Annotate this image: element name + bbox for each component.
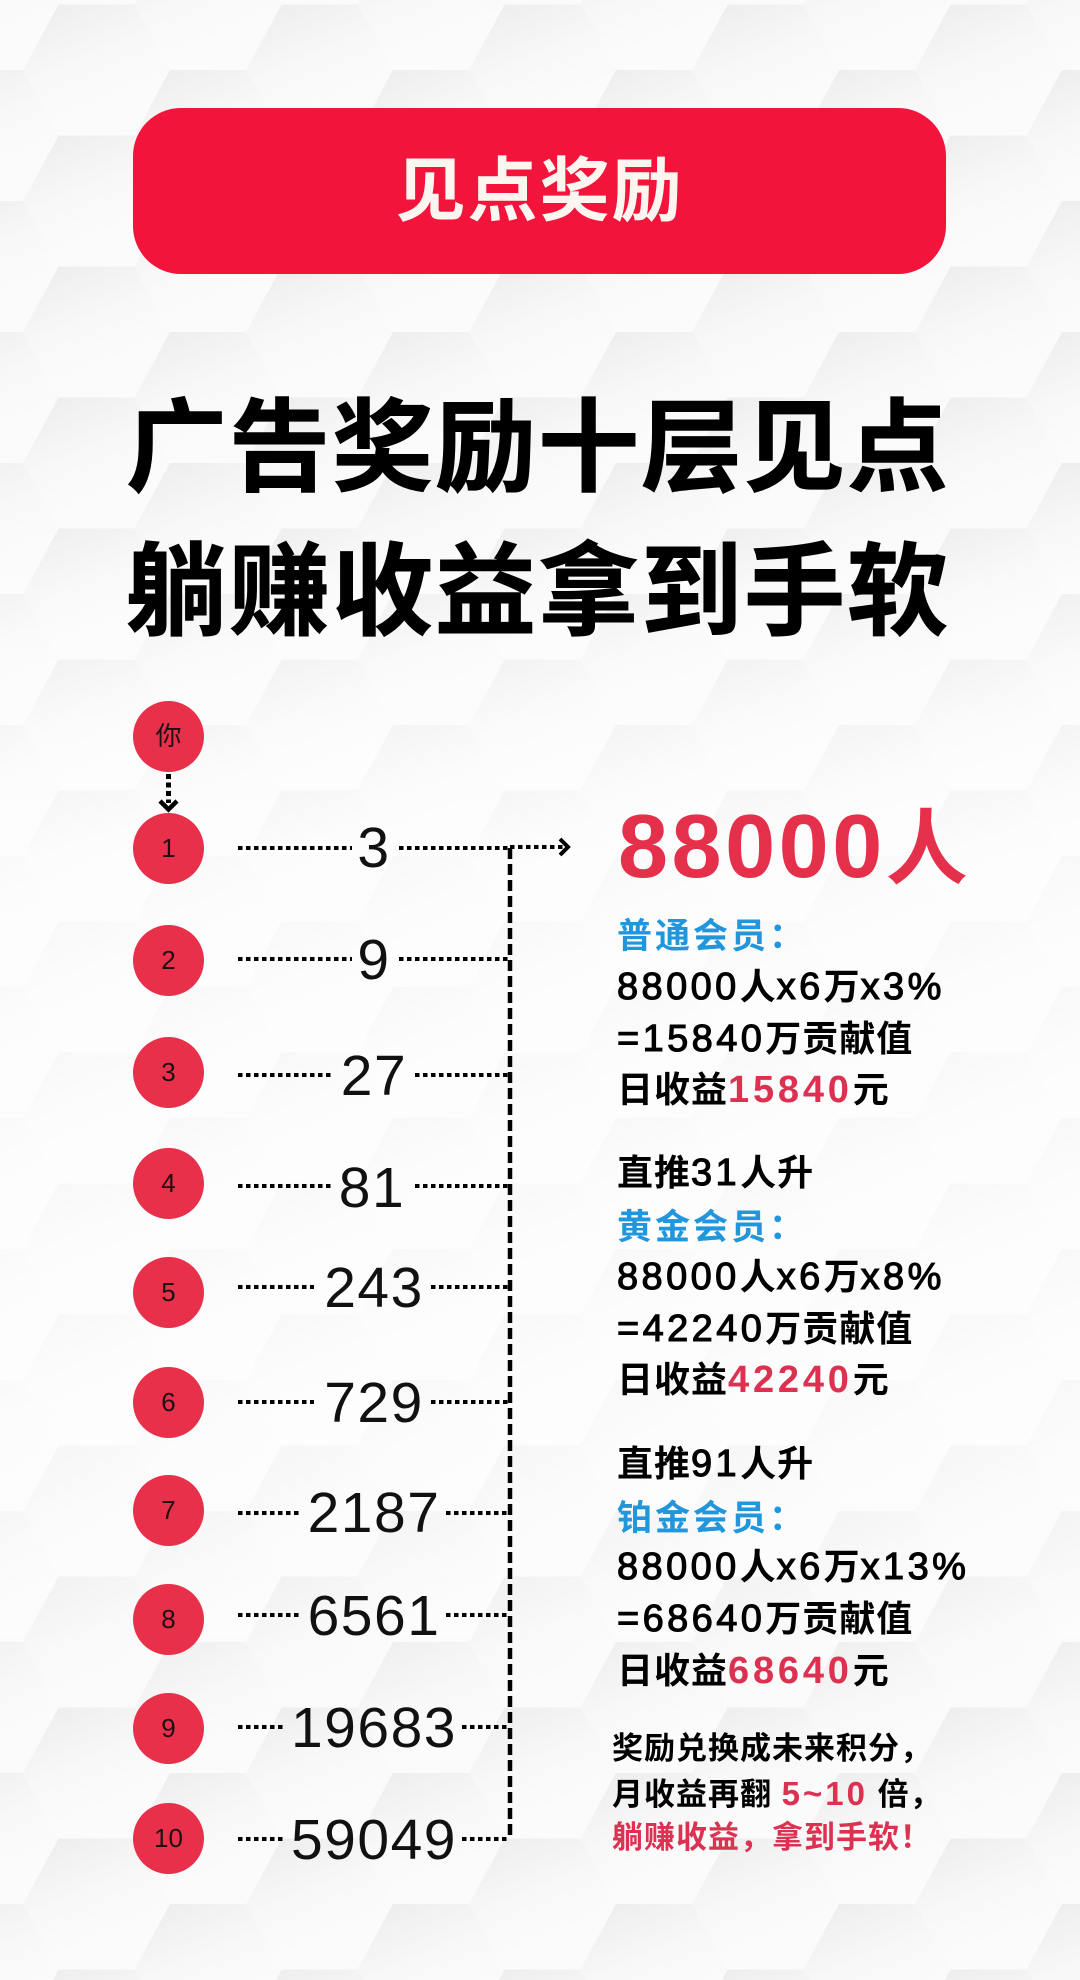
platinum member contribution: =68640万贡献值 <box>617 1598 913 1640</box>
row: level 10 <box>133 1803 506 1874</box>
note line 2: 月收益再翻 5~10 倍， <box>612 1775 942 1812</box>
note line 1: 奖励兑换成未来积分， <box>612 1731 932 1766</box>
regular member heading: 普通会员： <box>617 917 807 956</box>
gold member heading: 黄金会员： <box>617 1208 807 1247</box>
count 81: 81 <box>339 1156 405 1220</box>
row: level 9 <box>133 1693 506 1764</box>
circle 10 <box>133 1803 204 1874</box>
row: level 8 <box>133 1584 506 1655</box>
count 27: 27 <box>341 1044 407 1108</box>
title line 1: 广告奖励十层见点 <box>126 393 950 505</box>
block: gold member <box>617 1152 945 1401</box>
count 9: 9 <box>357 928 391 992</box>
count 6561: 6561 <box>308 1584 440 1648</box>
row: level 6 <box>133 1367 508 1438</box>
circle 6: 6 <box>161 1387 176 1417</box>
circle 8 <box>133 1584 204 1655</box>
regular member formula: 88000人x6万x3% <box>617 966 945 1008</box>
gold upgrade condition: 直推31人升 <box>617 1152 814 1194</box>
regular member contribution: =15840万贡献值 <box>617 1018 913 1060</box>
circle 9: 9 <box>161 1713 176 1743</box>
banner heading: 见点奖励 <box>396 152 684 230</box>
total: 88000 people: 88000人 <box>618 797 968 897</box>
title <box>126 393 950 649</box>
platinum member formula: 88000人x6万x13% <box>617 1546 969 1588</box>
circle 3: 3 <box>161 1057 176 1087</box>
row: level 5 <box>133 1256 508 1328</box>
row: level 3 <box>133 1037 508 1108</box>
gold member formula: 88000人x6万x8% <box>617 1256 945 1298</box>
circle 4: 4 <box>161 1168 176 1198</box>
count 3: 3 <box>357 816 391 880</box>
row: level 4 <box>133 1148 508 1220</box>
node: you: 你 <box>155 721 182 751</box>
circle 3 <box>133 1037 204 1108</box>
block: platinum member <box>617 1443 969 1692</box>
platinum member daily income: 日收益68640元 <box>617 1650 890 1692</box>
gold member daily income: 日收益42240元 <box>617 1359 890 1401</box>
circle 8: 8 <box>161 1604 176 1634</box>
platinum upgrade condition: 直推91人升 <box>617 1443 814 1485</box>
count 729: 729 <box>324 1371 424 1435</box>
note line 3: 躺赚收益，拿到手软！ <box>612 1820 932 1855</box>
row: level 1 <box>133 813 508 884</box>
circle 1: 1 <box>161 833 176 863</box>
node: you <box>133 701 204 772</box>
regular member daily income: 日收益15840元 <box>617 1069 890 1111</box>
circle 7 <box>133 1475 204 1546</box>
circle 6 <box>133 1367 204 1438</box>
circle 7: 7 <box>161 1495 176 1525</box>
circle 9 <box>133 1693 204 1764</box>
count 59049: 59049 <box>291 1808 457 1872</box>
circle 4 <box>133 1148 204 1219</box>
row: level 2 <box>133 925 508 996</box>
gold member contribution: =42240万贡献值 <box>617 1308 913 1350</box>
block: regular member <box>617 917 945 1111</box>
count 19683: 19683 <box>291 1696 457 1760</box>
count 2187: 2187 <box>308 1481 440 1545</box>
circle 5 <box>133 1257 204 1328</box>
banner: red rounded header <box>133 108 946 274</box>
count 243: 243 <box>324 1256 424 1320</box>
title line 2: 躺赚收益拿到手软 <box>126 537 950 649</box>
platinum member heading: 铂金会员： <box>617 1499 807 1538</box>
row: level 7 <box>133 1475 506 1546</box>
arrow: you to level 1 <box>158 774 178 813</box>
closing note <box>612 1731 942 1855</box>
circle 2 <box>133 925 204 996</box>
circle 10: 10 <box>154 1823 183 1853</box>
circle 1 <box>133 813 204 884</box>
circle 5: 5 <box>161 1277 176 1307</box>
arrow: to total <box>510 838 571 856</box>
connector: vertical dashed trunk <box>508 848 512 1835</box>
circle 2: 2 <box>161 945 176 975</box>
